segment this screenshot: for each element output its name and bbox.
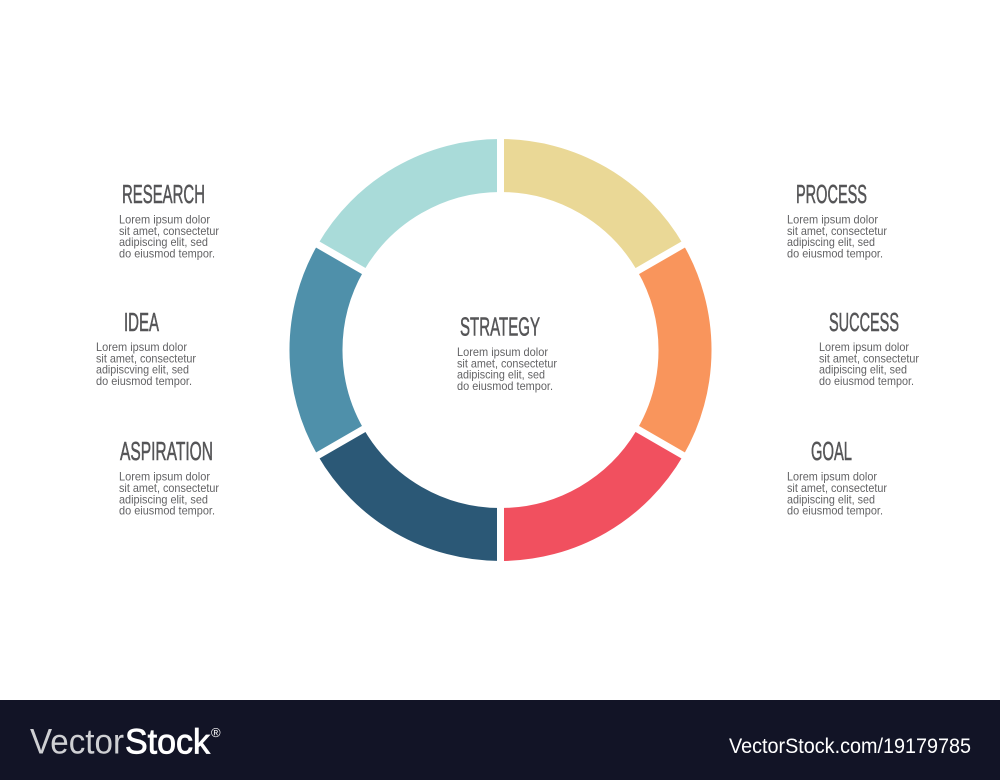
text: aspiration body: adipiscing elit, sed (119, 493, 208, 506)
label block: research (119, 179, 219, 260)
text: strategy body (457, 346, 557, 393)
text: goal body: sit amet, consectetur (787, 482, 887, 495)
registered mark: ® (211, 725, 221, 740)
segment: idea (316, 258, 341, 442)
segment: research (341, 166, 500, 258)
heading: success: SUCCESS (829, 307, 899, 337)
text: research body: sit amet, consectetur (119, 225, 219, 238)
footer bar (0, 700, 1000, 780)
heading: aspiration: ASPIRATION (120, 436, 213, 466)
text: strategy body: do eiusmod tempor. (457, 380, 553, 393)
text: goal body: do eiusmod tempor. (787, 505, 883, 518)
text: success body (819, 341, 919, 388)
text: goal body: Lorem ipsum dolor (787, 471, 877, 484)
text: idea body (96, 341, 196, 388)
heading: process: PROCESS (796, 179, 867, 209)
text: success body: sit amet, consectetur (819, 352, 919, 365)
text: process body: adipiscing elit, sed (787, 236, 875, 249)
text: aspiration body: sit amet, consectetur (119, 482, 219, 495)
text: aspiration body (119, 471, 219, 518)
text: success body: adipiscing elit, sed (819, 364, 907, 377)
text: goal body (787, 471, 887, 518)
text: process body: do eiusmod tempor. (787, 248, 883, 260)
text: research body: Lorem ipsum dolor (119, 214, 210, 226)
center block: strategy (457, 312, 557, 393)
heading: goal: GOAL (811, 436, 852, 466)
donut chart (306, 125, 695, 575)
segment: goal (500, 442, 660, 534)
text: research body: adipiscing elit, sed (119, 236, 208, 249)
text: research body (119, 214, 219, 260)
heading: research: RESEARCH (122, 179, 205, 209)
text: idea body: do eiusmod tempor. (96, 375, 192, 388)
segment: process (500, 165, 660, 258)
text: idea body: Lorem ipsum dolor (96, 341, 187, 354)
label block: success (819, 307, 919, 388)
text: success body: do eiusmod tempor. (819, 375, 914, 388)
footer logo: Vector (30, 722, 124, 762)
text: process body (787, 214, 887, 260)
label block: aspiration (119, 436, 219, 518)
text: research body: do eiusmod tempor. (119, 248, 215, 260)
footer logo: Stock (125, 722, 210, 762)
text: process body: sit amet, consectetur (787, 225, 887, 238)
segment: success (660, 258, 685, 442)
text: goal body: adipiscing elit, sed (787, 493, 875, 506)
label block: goal (787, 436, 887, 518)
text: strategy body: adipiscing elit, sed (457, 369, 545, 382)
text: strategy body: sit amet, consectetur (457, 357, 557, 370)
heading: idea: IDEA (124, 307, 159, 337)
footer logo (30, 722, 210, 762)
label block: process (787, 179, 887, 260)
label block: idea (96, 307, 196, 388)
footer image id: VectorStock.com/19179785 (729, 735, 971, 758)
text: process body: Lorem ipsum dolor (787, 214, 878, 226)
text: idea body: adipiscving elit, sed (96, 364, 189, 377)
text: idea body: sit amet, consectetur (96, 352, 196, 365)
heading: strategy: STRATEGY (460, 312, 540, 342)
text: aspiration body: Lorem ipsum dolor (119, 471, 210, 484)
text: aspiration body: do eiusmod tempor. (119, 505, 215, 518)
text: success body: Lorem ipsum dolor (819, 341, 909, 354)
segment: aspiration (341, 442, 500, 534)
text: strategy body: Lorem ipsum dolor (457, 346, 548, 359)
